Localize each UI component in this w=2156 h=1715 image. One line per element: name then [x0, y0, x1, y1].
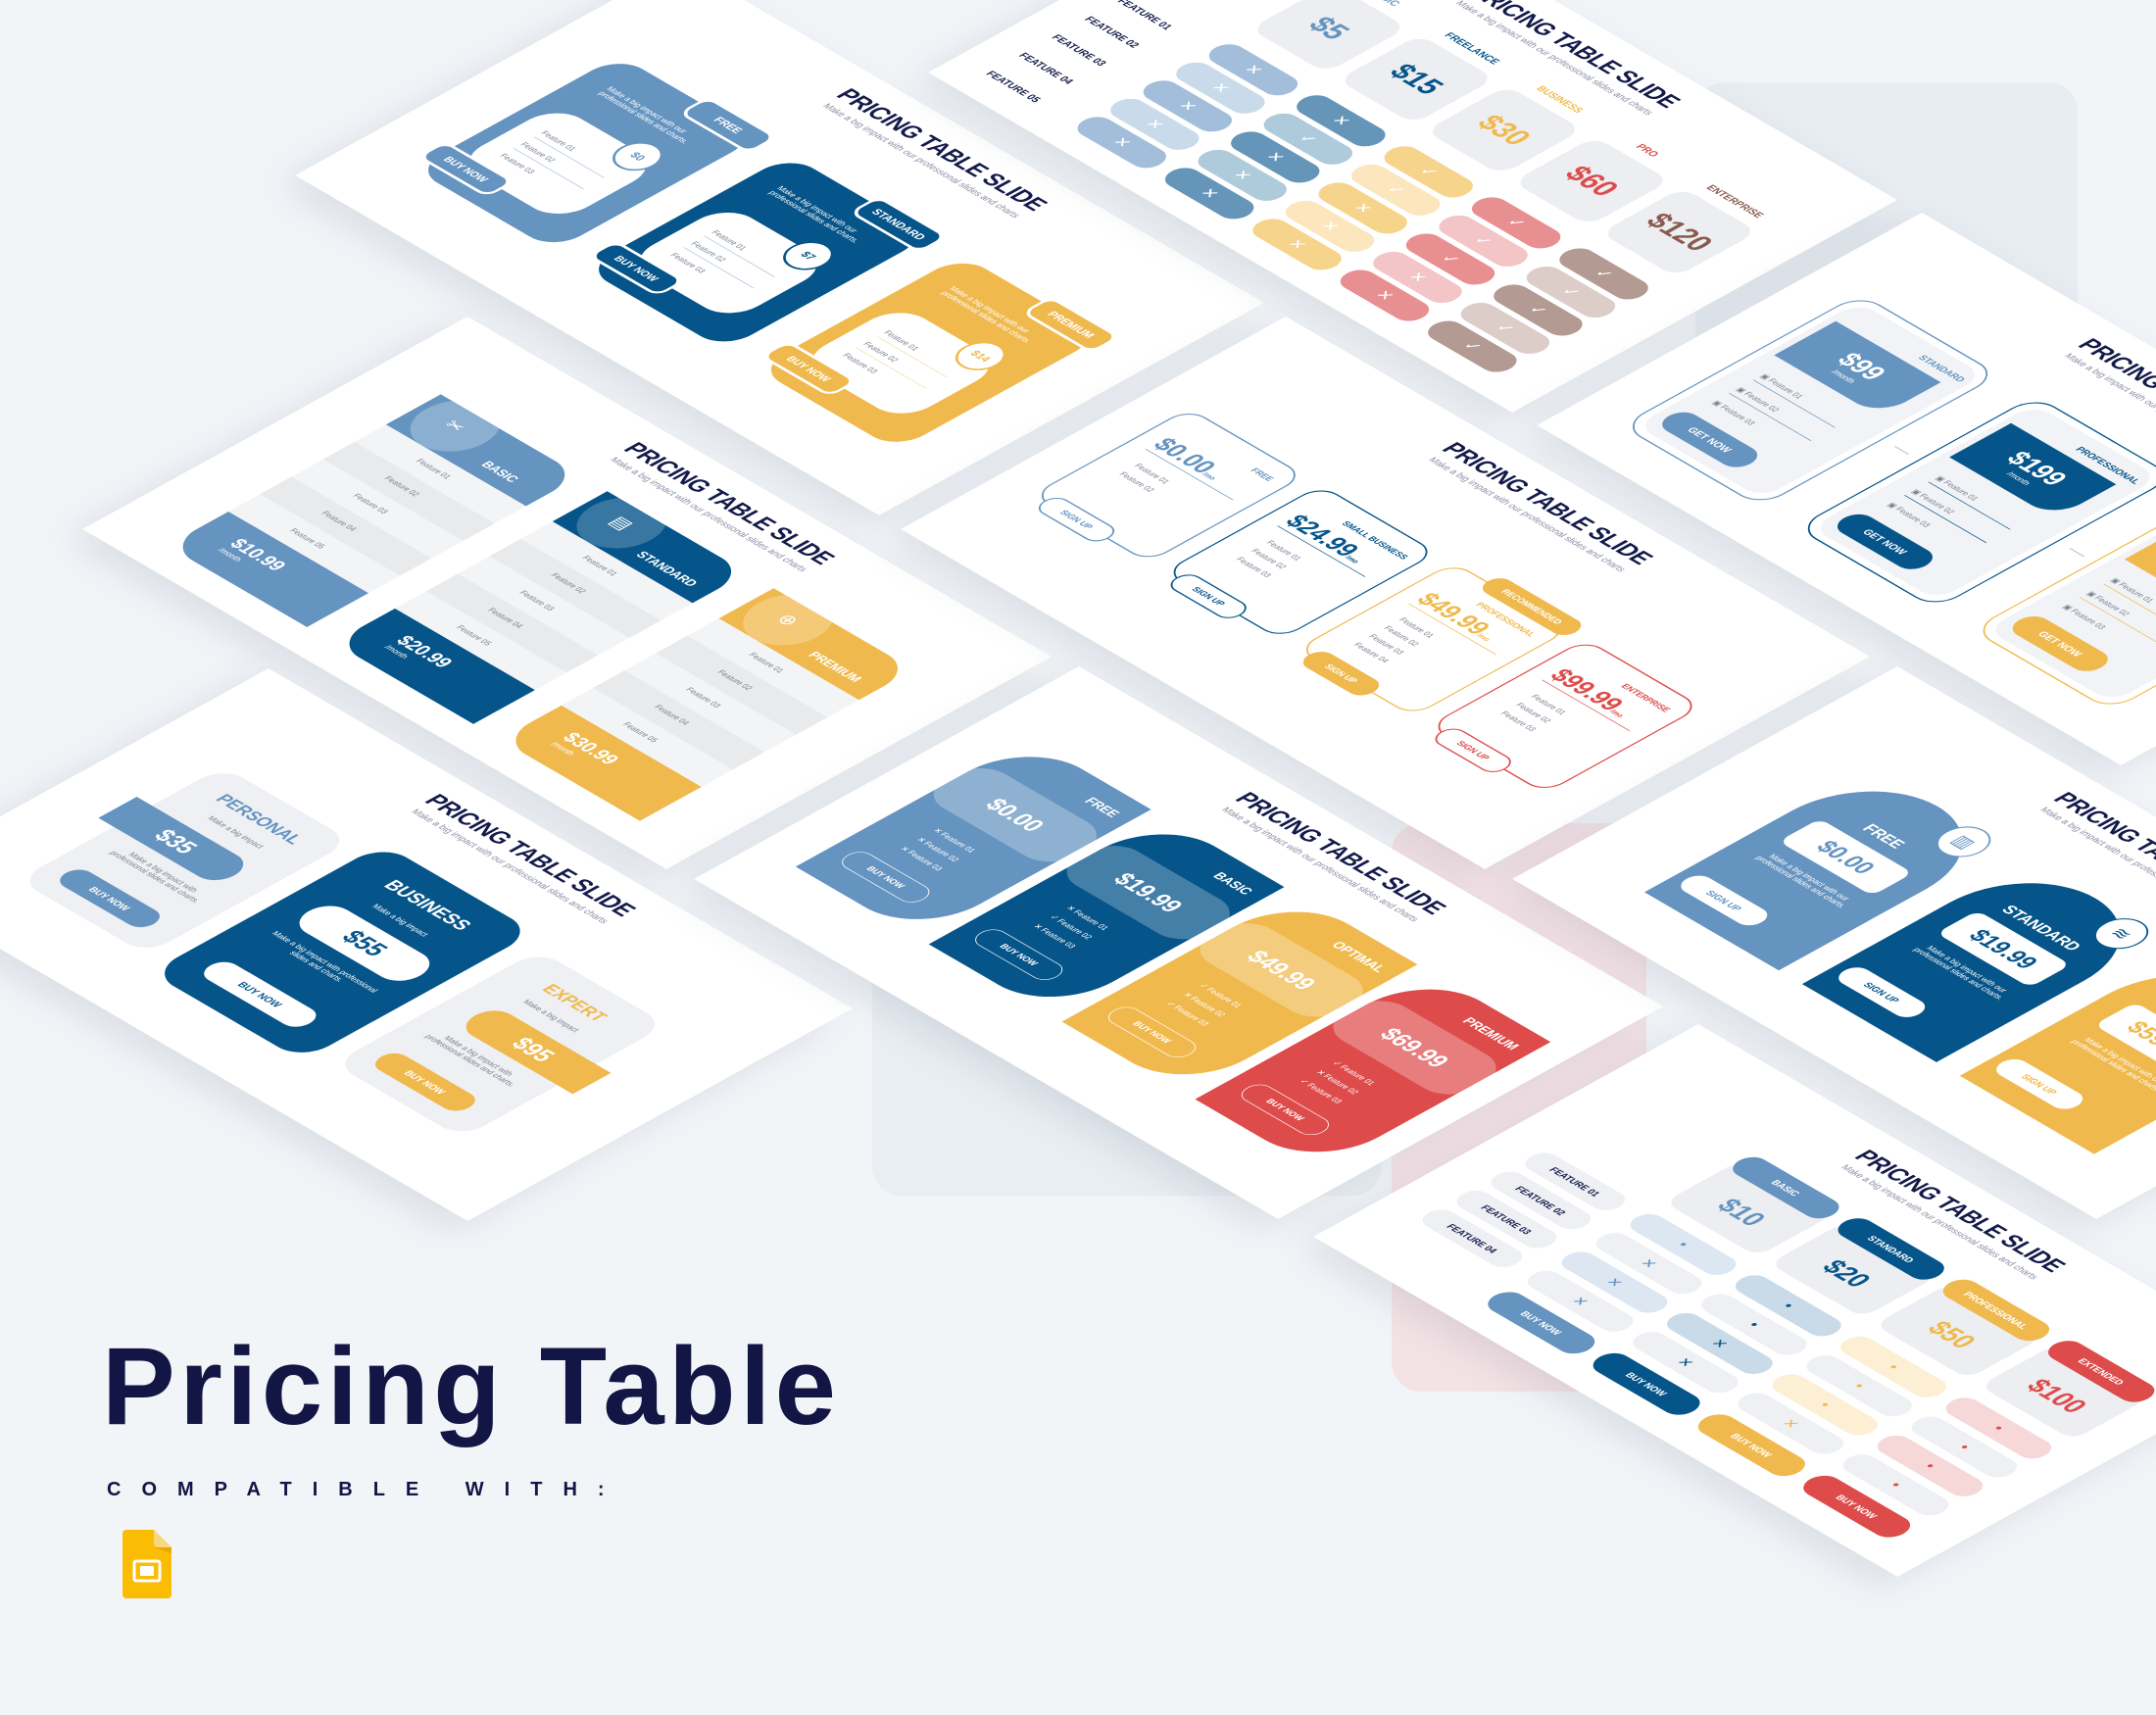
card: optimal $49.99: ✓ Feature 03 [1164, 1001, 1210, 1027]
card: premium: $14 [967, 349, 994, 364]
slide 1: three rounded cards [295, 0, 1264, 515]
card: professional $199: GET NOW [1860, 527, 1910, 556]
column: extended $100: • [1954, 1441, 1976, 1453]
card: enterprise $99.99: SIGN UP [1454, 740, 1493, 761]
card: free $0.00: Make a big impact with our professional slides and charts. [1753, 853, 1851, 909]
card: standard: Feature 02 [689, 240, 728, 264]
card: small business $24.99: $24.99/mo [1279, 511, 1365, 564]
card: free $0.00: ✕ Feature 03 [898, 846, 944, 872]
column: standard $20.99: ▤ [605, 513, 640, 532]
card: professional $49.99 recommended: RECOMMENDED [1498, 588, 1565, 626]
card: premium $69.99: BUY NOW [1263, 1098, 1307, 1122]
column: standard $20.99: Feature 01 [580, 555, 619, 577]
card: personal $35 [18, 766, 352, 955]
column: pro: $60 [1557, 162, 1627, 201]
slide 3: outlined cards with price boxes [1537, 213, 2156, 765]
column: professional $50: BUY NOW [1728, 1432, 1775, 1458]
column: pro: ✕ [1371, 287, 1399, 303]
column: freelance: ✕ [1229, 168, 1256, 183]
card: basic $19.99: ✓ Feature 02 [1048, 914, 1094, 941]
card: business $55: Make a big impact [369, 903, 430, 938]
card: standard $99: /month [1830, 368, 1857, 385]
feature labels: FEATURE 03 [1479, 1203, 1535, 1236]
card: expert $95: $95 [506, 1034, 562, 1065]
column: standard $20.99: $20.99 [391, 632, 459, 670]
column: basic $10.99: ✂ [439, 416, 472, 435]
card: personal $35: Make a big impact [205, 815, 266, 850]
card: premium: BUY NOW [784, 354, 834, 383]
card: free $0.00: $0.00/mo [1147, 434, 1222, 481]
column: pro: ✕ [1404, 270, 1432, 285]
column: business: ✓ [1415, 164, 1443, 179]
column: basic [1078, 0, 1403, 169]
column: extended $100: EXTENDED [2076, 1356, 2128, 1387]
column: basic $10.99: /month [216, 547, 244, 564]
card: free $0.00 [796, 738, 1152, 938]
column: extended $100: BUY NOW [1834, 1493, 1881, 1520]
column: pro: ✓ [1502, 215, 1531, 230]
column: standard $20.99: Feature 02 [549, 572, 588, 595]
card: basic $19.99 [929, 815, 1285, 1015]
card: standard [584, 155, 930, 350]
card: optimal $49.99: $49.99 [1241, 947, 1323, 994]
column: professional $50: ✕ [1778, 1417, 1803, 1431]
card: free: Feature 01 [538, 130, 578, 153]
column: standard $20.99: /month [382, 644, 411, 660]
column: business: BUSINESS [1534, 84, 1587, 115]
card: professional $199: ▣ Feature 03 [1885, 502, 1933, 528]
card: standard $99: $99 [1831, 348, 1893, 384]
card: professional $199: PROFESSIONAL [2073, 445, 2143, 486]
card: expert $95: Make a big impact with professional slides and charts. [422, 1033, 517, 1088]
card: standard $99: GET NOW [1685, 425, 1735, 454]
column: enterprise: ✓ [1591, 266, 1618, 281]
background panel: gray square [1695, 82, 2078, 455]
card: enterprise $99.99: ENTERPRISE [1619, 682, 1673, 713]
card: free $0.00: Feature 01 [1132, 463, 1171, 485]
card: standard: Feature 03 [668, 252, 708, 274]
card: premium $69.99: $69.99 [1374, 1024, 1456, 1071]
slide 6: personal / business / expert cards: Make a big impact with our professional slides and charts [409, 808, 612, 925]
column: premium $30.99: Feature 04 [652, 704, 691, 726]
column: premium $30.99: Feature 03 [683, 686, 722, 709]
column: basic $10.99: Feature 01 [414, 458, 453, 480]
column: business: $30 [1470, 111, 1539, 150]
column: standard $20: STANDARD [1865, 1234, 1917, 1264]
column: professional $50: $50 [1921, 1316, 1984, 1352]
slide 4: columns with icon headers: Make a big impact with our professional slides and charts [608, 456, 810, 573]
column: enterprise: ✓ [1557, 284, 1586, 300]
column: freelance: ✓ [1295, 131, 1322, 147]
card: premium $69.99: ✓ Feature 01 [1330, 1060, 1377, 1087]
card: professional $49.99 recommended: Feature 03 [1366, 633, 1405, 656]
card: free $0.00: SIGN UP [1703, 889, 1744, 912]
column: standard $20: BUY NOW [1623, 1371, 1670, 1397]
card: professional $199: $199 [2000, 447, 2075, 490]
column: business: ✕ [1316, 219, 1345, 234]
column: extended $100 [1803, 1341, 2154, 1538]
card: free $0.00: FREE [1249, 466, 1276, 483]
card: free $0.00: FREE [1081, 796, 1123, 819]
card: enterprise $99.99: $99.99/mo [1544, 665, 1630, 719]
card: small business $24.99: SMALL BUSINESS [1340, 519, 1411, 561]
card: professional $49.99 recommended: $49.99/mo [1410, 589, 1496, 643]
card: small business $24.99: Feature 01 [1264, 539, 1303, 563]
column: enterprise: ✓ [1492, 320, 1519, 336]
card: professional $199: /month [2004, 470, 2033, 487]
column: freelance: FREELANCE [1442, 30, 1503, 66]
card: standard: $7 [798, 250, 819, 262]
card: optimal $49.99: ✓ Feature 01 [1197, 982, 1244, 1009]
card: professional $49.99 recommended: Feature 01 [1396, 616, 1436, 639]
card: personal $35: Make a big impact with professional slides and charts. [107, 850, 202, 905]
card: basic $19.99: $19.99 [1107, 869, 1190, 915]
column: freelance: ✕ [1196, 185, 1224, 201]
slide 1: three rounded cards: PRICING TABLE SLIDE [830, 85, 1054, 214]
card: standard $19.99: SIGN UP [1861, 980, 1902, 1004]
column: extended $100: • [1886, 1479, 1907, 1491]
card: professional $49.99 recommended [1296, 562, 1570, 716]
column: basic $10: ✕ [1637, 1256, 1661, 1271]
column: basic $10.99 [167, 394, 581, 627]
column: standard $20: • [1778, 1299, 1799, 1311]
column: basic $10.99: Feature 04 [318, 510, 359, 532]
column: freelance: $15 [1382, 60, 1451, 99]
card: standard: BUY NOW [612, 254, 662, 283]
card: free: FREE [710, 115, 746, 135]
slide 2: feature comparison table [928, 0, 1897, 413]
card: standard $99: STANDARD [1916, 354, 1968, 383]
slide 6: personal / business / expert cards: PRICING TABLE SLIDE [418, 791, 642, 919]
column: basic $10.99: $10.99 [224, 535, 292, 573]
card: free: Make a big impact with our professional slides and charts. [596, 85, 691, 145]
card: professional $199: ▣ Feature 01 [1933, 475, 1981, 502]
card: pro $59.99: SIGN UP [2019, 1072, 2060, 1096]
slide 6: personal / business / expert cards [0, 668, 853, 1221]
card: free: BUY NOW [441, 155, 491, 183]
card: free $0.00: Feature 02 [1117, 470, 1156, 494]
feature labels: FEATURE 02 [1513, 1185, 1569, 1217]
column: basic $10: $10 [1710, 1195, 1774, 1230]
card: premium $69.99 [1195, 970, 1550, 1171]
slide 9: comparison table with buy buttons: PRICING TABLE SLIDE [1848, 1147, 2072, 1275]
card: expert $95: BUY NOW [402, 1068, 449, 1096]
card: premium: Feature 01 [881, 329, 920, 352]
feature labels: FEATURE 04 [1445, 1222, 1500, 1254]
column: premium $30.99: /month [549, 741, 576, 757]
card: basic $19.99: BUY NOW [998, 942, 1041, 967]
slide 9: comparison table with buy buttons [1313, 1024, 2156, 1577]
card: pro $59.99 [1960, 951, 2156, 1154]
card: free $0.00 [1031, 408, 1305, 563]
column: basic $10: • [1673, 1239, 1694, 1250]
column: basic: ✕ [1174, 98, 1201, 114]
column: pro: PRO [1634, 142, 1662, 159]
card: premium: PREMIUM [1045, 310, 1098, 340]
column: enterprise: ✓ [1525, 302, 1552, 318]
card: free: Feature 03 [498, 153, 537, 175]
column: standard $20.99: Feature 05 [454, 624, 493, 647]
slide 5: four outlined cards [901, 317, 1870, 869]
card: premium $69.99: PREMIUM [1459, 1015, 1523, 1052]
card: basic $19.99: BASIC [1209, 870, 1256, 897]
column: basic: ✕ [1108, 134, 1136, 150]
card: professional $49.99 recommended: Feature 02 [1382, 625, 1421, 648]
column: standard $20: ✕ [1673, 1355, 1697, 1370]
column: business: ✕ [1349, 200, 1377, 216]
column: enterprise: ✓ [1458, 338, 1487, 354]
feature labels: FEATURE 02 [1082, 15, 1143, 49]
column: premium $30.99: Feature 02 [714, 669, 755, 692]
card: standard $19.99: $19.99 [1963, 925, 2045, 972]
subtitle: compatible with: COMPATIBLE WITH: [107, 1479, 625, 1500]
card: free $0.00: ✕ Feature 02 [914, 836, 960, 863]
card: professional $49.99 recommended: Feature 04 [1351, 642, 1391, 664]
card: basic $19.99: ✕ Feature 01 [1064, 905, 1110, 932]
slide 7: four solid cards: Make a big impact with our professional slides and charts [1219, 806, 1422, 923]
card: enterprise $99.99: Feature 03 [1498, 710, 1538, 733]
card: third yellow: ▣ Feature 01 [2108, 577, 2155, 605]
column: freelance [1164, 30, 1503, 220]
column: business: ✕ [1284, 236, 1311, 252]
card: personal $35: PERSONAL [211, 792, 307, 847]
card: optimal $49.99: OPTIMAL [1328, 939, 1390, 974]
column: business [1252, 84, 1587, 270]
card: premium: Feature 03 [840, 352, 879, 374]
column: enterprise: $120 [1639, 209, 1721, 256]
card: free $0.00: $0.00 [980, 795, 1052, 835]
column: freelance: ✕ [1261, 149, 1290, 165]
column: basic $10.99: Feature 02 [382, 475, 421, 498]
card: third yellow: ▣ Feature 03 [2060, 604, 2107, 631]
feature labels [1423, 1152, 1625, 1267]
card: standard $99 [1620, 293, 2000, 508]
slide 5: four outlined cards: PRICING TABLE SLIDE [1436, 439, 1659, 567]
card: standard $99: ▣ Feature 03 [1710, 400, 1757, 426]
column: standard $20.99: Feature 04 [485, 607, 524, 629]
card: premium: Feature 02 [860, 341, 900, 364]
card: third yellow: ▣ Feature 02 [2084, 590, 2132, 617]
column: basic: ✕ [1240, 62, 1268, 77]
feature labels: FEATURE 03 [1050, 32, 1109, 68]
column: premium $30.99: Feature 05 [620, 721, 660, 744]
card: small business $24.99: SIGN UP [1190, 585, 1228, 608]
column: basic: ✕ [1207, 80, 1235, 96]
card: business $55: BUSINESS [379, 877, 477, 933]
card: free [414, 56, 760, 251]
card: expert $95 [333, 950, 667, 1138]
column: enterprise: ENTERPRISE [1704, 183, 1767, 220]
background panel: gray square lower [872, 882, 1382, 1196]
card: enterprise $99.99: Feature 02 [1513, 702, 1552, 724]
slide 7: four solid cards: PRICING TABLE SLIDE [1229, 789, 1452, 917]
column: basic $10: ✕ [1568, 1295, 1592, 1308]
card: personal $35: BUY NOW [86, 885, 133, 912]
card: professional $49.99 recommended: PROFESSIONAL [1473, 601, 1539, 638]
card: standard $99: ▣ Feature 02 [1734, 386, 1781, 414]
card: standard: STANDARD [868, 207, 929, 242]
column: enterprise [1428, 183, 1767, 372]
column: professional $50: • [1848, 1380, 1871, 1392]
feature labels [984, 0, 1175, 104]
card: standard: Make a big impact with our professional slides and charts. [766, 185, 861, 244]
column: basic $10: ✕ [1602, 1276, 1627, 1290]
card: standard $19.99 [1802, 859, 2156, 1062]
card: expert $95: Make a big impact [520, 999, 581, 1034]
slide 1: three rounded cards: Make a big impact with our professional slides and charts [820, 102, 1023, 220]
card: third yellow [1971, 497, 2156, 711]
column: premium $30.99: ⊕ [772, 611, 806, 629]
slide 4: columns with icon headers: PRICING TABLE SLIDE [617, 439, 841, 567]
column: freelance: ✕ [1327, 113, 1355, 128]
card: free $0.00: $0.00 [1810, 837, 1882, 877]
slide 8: tombstone cards [1512, 666, 2156, 1219]
column: standard $20.99 [333, 491, 748, 724]
card: free $0.00: ▥ [1946, 832, 1982, 852]
card: small business $24.99: Feature 02 [1249, 548, 1288, 570]
column: basic $10.99: BASIC [478, 460, 522, 484]
column: professional $50: • [1883, 1360, 1904, 1373]
slide 9: comparison table with buy buttons: Make a big impact with our professional slides and charts [1838, 1163, 2041, 1281]
slide 4: columns with icon headers [82, 317, 1052, 869]
card: standard $19.99: STANDARD [1997, 903, 2085, 954]
main title: Pricing Table [102, 1325, 840, 1447]
column: basic $10: BASIC [1769, 1178, 1803, 1198]
card: premium $69.99: ✓ Feature 03 [1298, 1078, 1344, 1104]
card: personal $35: $35 [148, 825, 204, 858]
card: business $55: Make a big impact with professional slides and charts. [270, 930, 379, 994]
slide 2: feature comparison table: Make a big impact with our professional slides and charts [1453, 0, 1656, 117]
column: standard $20: • [1743, 1318, 1765, 1331]
column: standard $20 [1593, 1218, 1944, 1415]
feature labels: FEATURE 04 [1016, 51, 1077, 85]
card: optimal $49.99: ✕ Feature 02 [1181, 992, 1227, 1018]
column: extended $100: • [1988, 1422, 2010, 1434]
card: free $0.00 [1644, 767, 2005, 970]
column: standard $20: ✕ [1707, 1337, 1732, 1350]
card: basic $19.99: ✕ Feature 03 [1031, 923, 1077, 950]
card: standard $99: ▣ Feature 01 [1758, 373, 1805, 400]
card: professional $199: ▣ Feature 02 [1909, 488, 1956, 515]
card: third yellow: GET NOW [2035, 629, 2085, 659]
column: basic: $5 [1301, 12, 1357, 44]
card: professional $199 [1795, 395, 2156, 610]
card: free $0.00: ✕ Feature 01 [931, 827, 977, 855]
card: small business $24.99 [1163, 485, 1438, 640]
column: basic $10.99: Feature 05 [287, 527, 326, 550]
card: enterprise $99.99 [1428, 639, 1702, 794]
icon: google slides [122, 1530, 172, 1598]
card: standard $19.99: Make a big impact with our professional slides and charts. [1911, 945, 2009, 1002]
card: free $0.00: SIGN UP [1057, 509, 1096, 530]
card: premium [757, 255, 1102, 450]
card: optimal $49.99: BUY NOW [1130, 1020, 1174, 1045]
column: extended $100: $100 [2020, 1374, 2094, 1417]
column: professional $50 [1697, 1280, 2050, 1476]
column: professional $50: PROFESSIONAL [1961, 1290, 2032, 1331]
column: pro [1341, 141, 1662, 321]
column: premium $30.99: Feature 01 [747, 652, 786, 674]
column: business: ✓ [1382, 182, 1410, 198]
card: enterprise $99.99: Feature 01 [1529, 694, 1568, 716]
card: small business $24.99: Feature 03 [1234, 556, 1273, 578]
column: basic: ✕ [1141, 117, 1169, 132]
column: basic $10: BUY NOW [1518, 1309, 1565, 1337]
card: premium: Make a big impact with our professional slides and charts. [939, 285, 1033, 345]
card: business $55 [150, 844, 535, 1060]
card: business $55: BUY NOW [235, 980, 285, 1009]
column: standard $20: $20 [1815, 1255, 1879, 1292]
card: expert $95: EXPERT [537, 982, 612, 1024]
column: pro: ✓ [1437, 251, 1465, 267]
card: standard $19.99: ≋ [2105, 924, 2138, 943]
card: free $0.00: BUY NOW [864, 864, 907, 890]
feature labels: FEATURE 01 [1547, 1165, 1603, 1198]
card: optimal $49.99 [1062, 893, 1417, 1093]
background panel: pink square [1392, 823, 1646, 1392]
column: premium $30.99: $30.99 [558, 729, 624, 767]
column: basic $10.99: Feature 03 [351, 493, 390, 515]
column: premium $30.99: PREMIUM [806, 650, 865, 684]
column: pro: ✓ [1470, 233, 1497, 249]
card: professional $49.99 recommended: SIGN UP [1322, 662, 1360, 685]
column: extended $100: • [1920, 1460, 1941, 1472]
feature labels: FEATURE 05 [984, 69, 1044, 104]
card: free: Feature 02 [517, 141, 558, 164]
column: basic $10 [1488, 1156, 1838, 1354]
column: professional $50: • [1814, 1398, 1837, 1410]
slide 7: four solid cards [694, 666, 1663, 1219]
card: business $55: $55 [335, 926, 394, 960]
column: premium $30.99 [500, 588, 913, 821]
slide 5: four outlined cards: Make a big impact with our professional slides and charts [1426, 456, 1629, 573]
column: standard $20.99: STANDARD [633, 550, 701, 589]
card: free $0.00: FREE [1858, 821, 1910, 851]
card: standard: Feature 01 [709, 229, 749, 252]
card: free: $0 [627, 150, 649, 163]
card: premium $69.99: ✕ Feature 02 [1314, 1069, 1360, 1096]
column: standard $20.99: Feature 03 [516, 590, 557, 612]
